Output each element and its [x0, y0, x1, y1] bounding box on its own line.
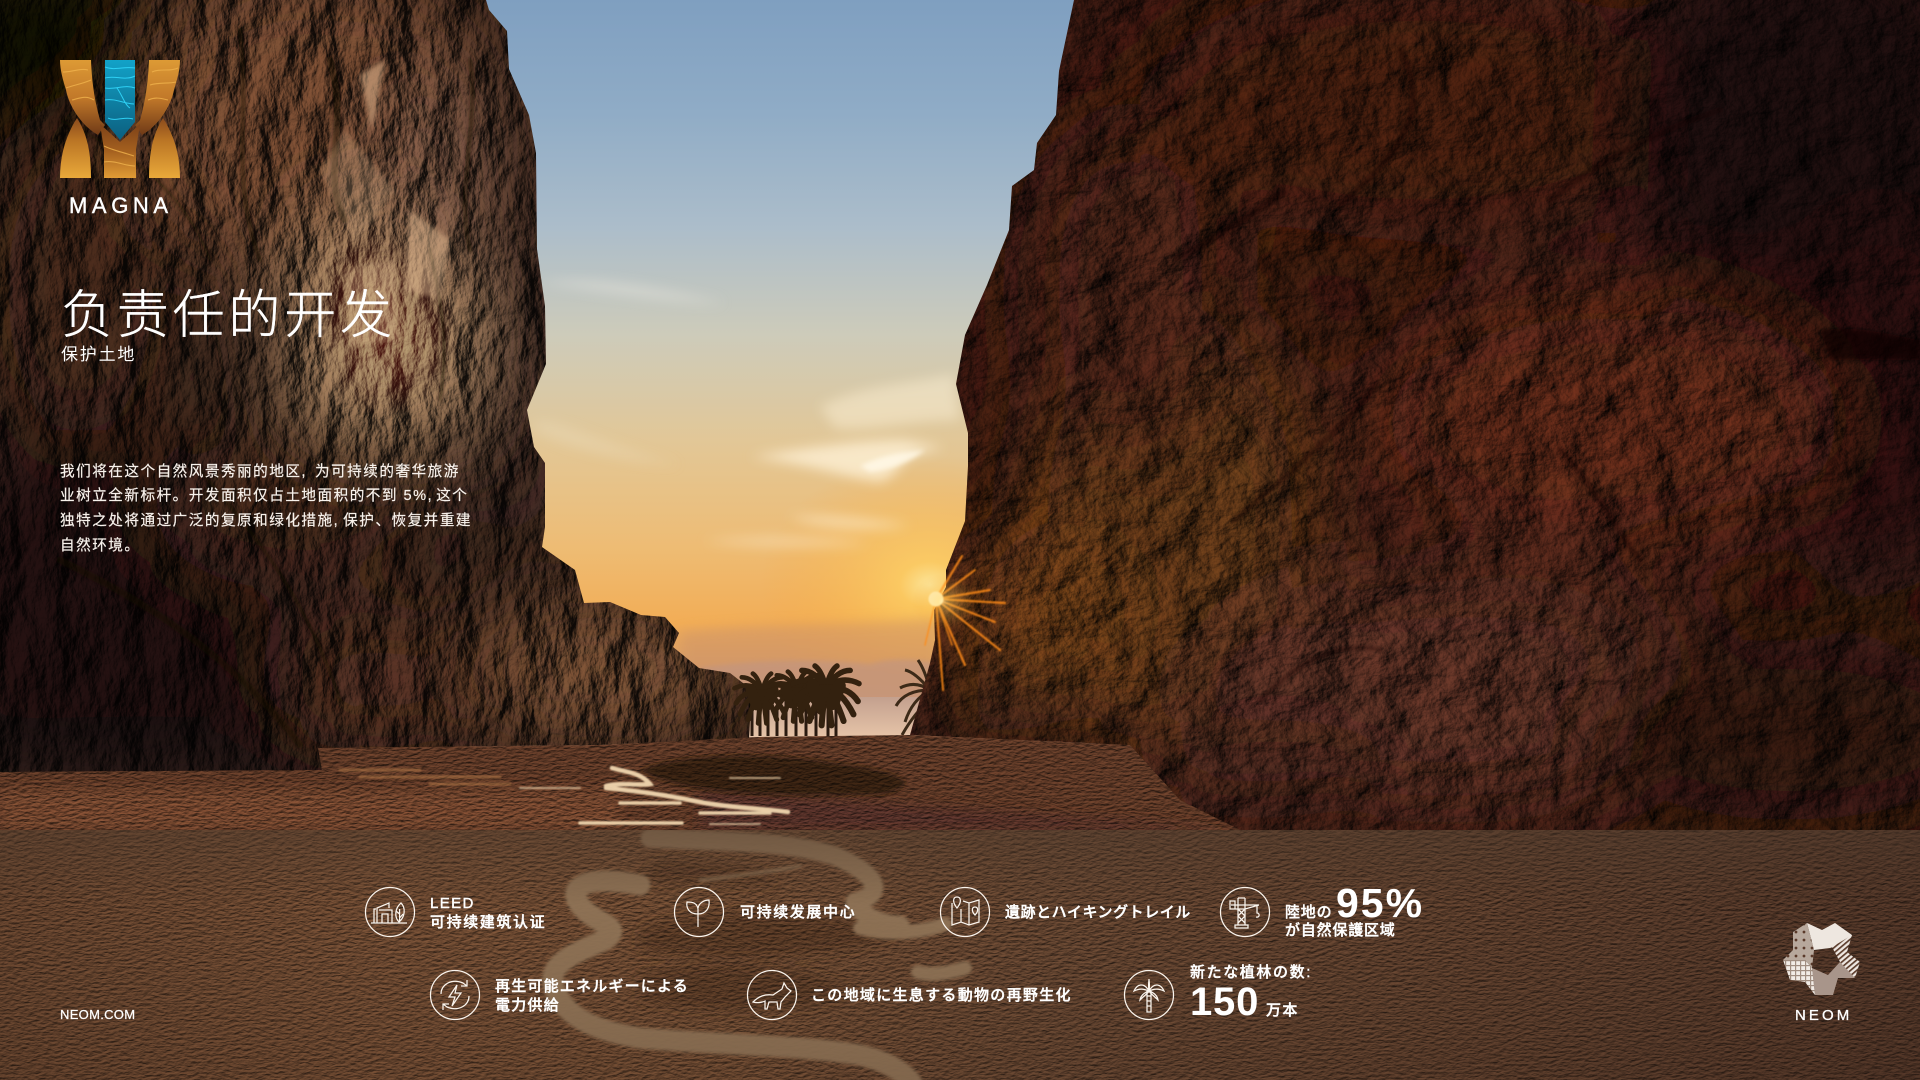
logo: MAGNA [60, 60, 180, 218]
translucent bottom band [0, 830, 1920, 1080]
label: LEED [430, 895, 475, 912]
wordmark: MAGNA [69, 193, 173, 218]
label: 新たな植林の数: [1190, 964, 1312, 981]
item: renewable energy supply [430, 970, 689, 1020]
desert ground with water reflections [0, 735, 1240, 830]
rock relief texture [0, 0, 750, 772]
label: land share: 陸地の [1285, 904, 1332, 921]
stat: 150: 150 [1190, 980, 1259, 1024]
item: renewable energy supply: 電力供給 [495, 997, 560, 1014]
website: NEOM.COM [60, 1007, 135, 1022]
wordmark: NEOM [1795, 1007, 1852, 1024]
subtitle: 保护土地 [61, 345, 136, 364]
sun and sunburst [912, 556, 1005, 690]
ground texture [0, 735, 1238, 830]
item: sustainability centre [674, 886, 856, 938]
label: 再生可能エネルギーによる [495, 978, 689, 995]
label: protected: が自然保護区域 [1285, 922, 1396, 939]
item: 95% protected land [1220, 880, 1424, 939]
sand texture [0, 830, 1920, 1080]
item: 1.5 million new trees [1124, 962, 1314, 1020]
icon: recycling bolt [430, 970, 480, 1020]
icon: crane [1220, 886, 1270, 938]
icon: fox [747, 970, 797, 1020]
icon: building and leaf [364, 886, 416, 938]
label: 可持续发展中心 [740, 904, 856, 921]
icon: palm tree [1124, 970, 1174, 1020]
emblem [1780, 920, 1864, 1000]
item: heritage sites and hiking trails [940, 886, 1191, 938]
label: この地域に生息する動物の再野生化 [811, 987, 1072, 1004]
item: LEED certification: 可持续建筑认证 [430, 914, 546, 931]
body text: 我们将在这个自然风景秀丽的地区, 为可持续的奢华旅游 [60, 464, 460, 480]
body text: 业树立全新标杆。开发面积仅占土地面积的不到 5%,这个 [60, 488, 468, 504]
logo emblem [60, 60, 180, 178]
sky [460, 0, 1100, 760]
item: rewilding of native animals [747, 970, 1075, 1020]
stream in sand [553, 838, 965, 1080]
icon: sprout [674, 886, 724, 938]
right palm [896, 660, 930, 735]
icon: map with pins [940, 886, 990, 938]
rock relief texture [900, 0, 1920, 840]
title: 负责任的开发 [61, 287, 396, 345]
palm trees [734, 660, 930, 736]
right canyon wall [900, 0, 1920, 840]
NEOM logo [1780, 920, 1864, 1022]
sun glow [760, 455, 1100, 715]
left canyon wall [0, 0, 750, 772]
body text [60, 463, 472, 554]
body text: 独特之处将通过广泛的复原和绿化措施, 保护、恢复并重建 [60, 513, 472, 529]
dark speckled banks [640, 860, 900, 1010]
heading [61, 287, 396, 364]
label: 遺跡とハイキングトレイル [1005, 904, 1191, 921]
item: LEED certification [364, 886, 546, 938]
body text: 自然环境。 [60, 538, 140, 554]
stat: 95%: 95% [1336, 880, 1424, 926]
distant mountains and sea [680, 618, 950, 737]
clouds [535, 280, 960, 547]
unit: 万本 [1266, 1002, 1299, 1019]
